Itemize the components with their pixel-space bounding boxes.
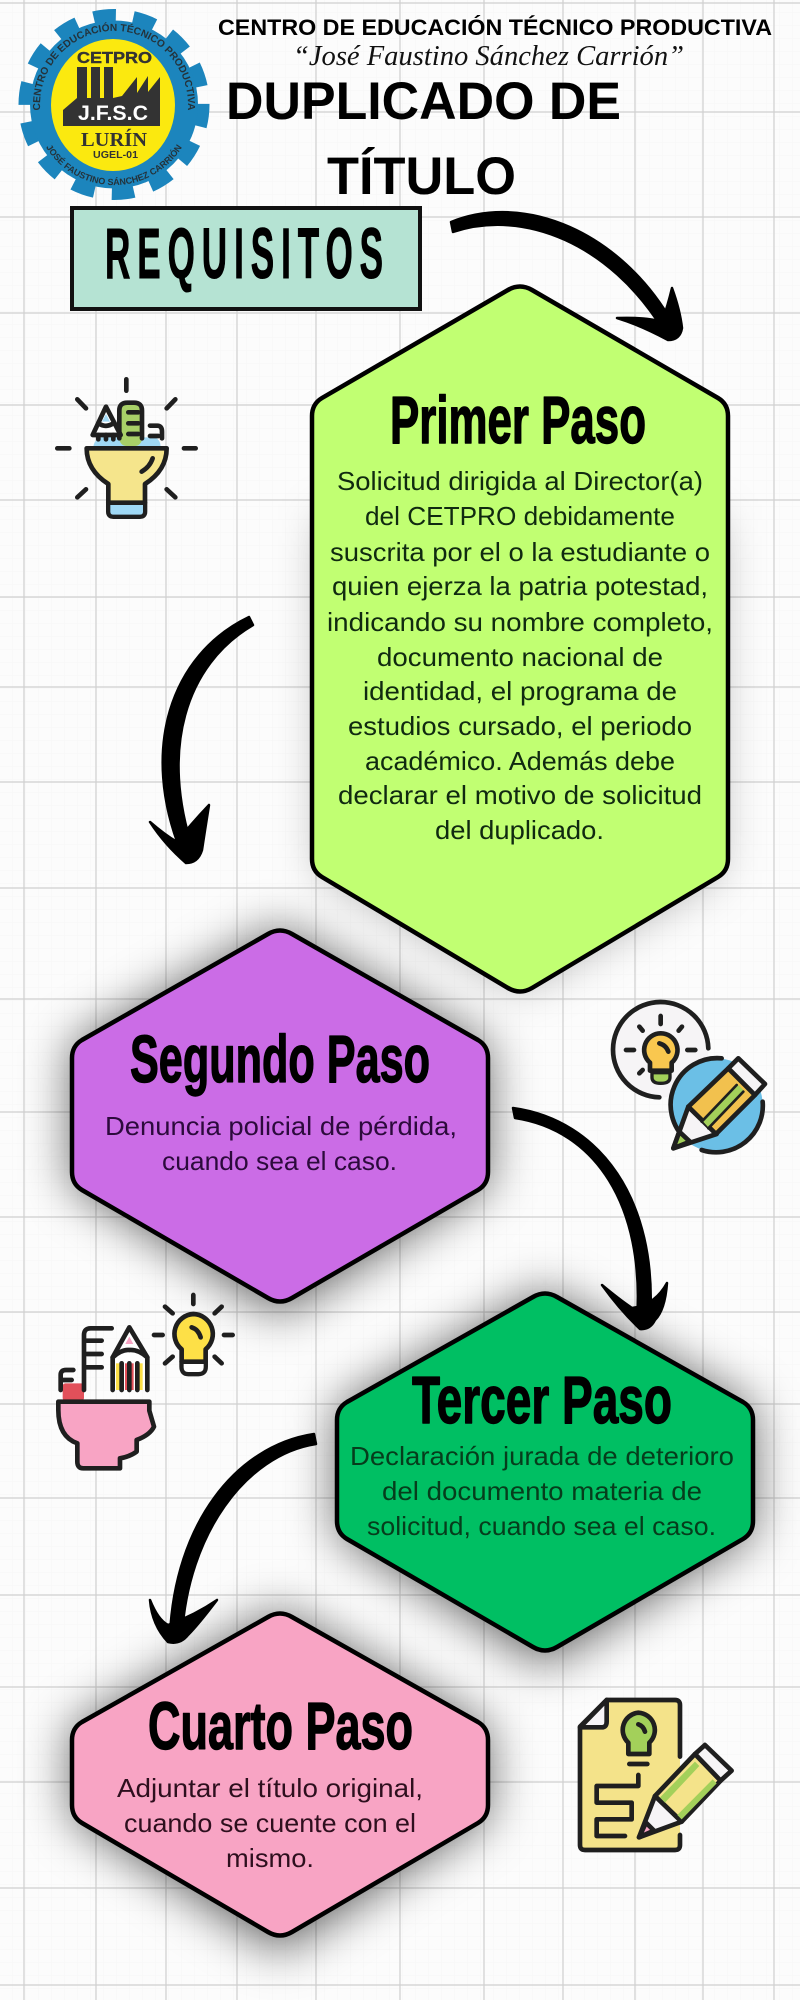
heading: tercer paso: Tercer Paso xyxy=(412,1363,672,1438)
logo: CETPRO gear emblem: CENTRO DE EDUCACIÓN TÉCNICO PRODUCTIVA xyxy=(32,22,196,110)
icon: head with pencil, ruler and light bulb xyxy=(58,1295,233,1468)
header: school name: “José Faustino Sánchez Carrión” xyxy=(293,41,684,72)
heading: cuarto paso: Cuarto Paso xyxy=(148,1689,413,1764)
arrow: requisitos to primer paso xyxy=(451,212,682,340)
logo: CETPRO gear emblem xyxy=(18,9,210,200)
text: cuarto paso body: mismo. xyxy=(226,1843,314,1873)
logo: CETPRO gear emblem: LURÍN xyxy=(81,129,147,151)
text: cuarto paso body: cuando se cuente con el xyxy=(124,1808,416,1838)
text: primer paso body: académico. Además debe xyxy=(365,746,675,776)
text: primer paso body: indicando su nombre completo, xyxy=(327,607,713,637)
text: primer paso body: identidad, el programa de xyxy=(363,676,677,706)
header: institution name: CENTRO DE EDUCACIÓN TÉCNICO PRODUCTIVA xyxy=(218,15,772,40)
icon: document with bulb and pencil xyxy=(580,1700,732,1850)
logo: CETPRO gear emblem: J.F.S.C xyxy=(78,102,148,125)
logo: CETPRO gear emblem: JOSÉ FAUSTINO SÁNCHEZ CARRIÓN xyxy=(46,144,182,186)
icon: light bulb and pencil on circles xyxy=(613,1002,765,1152)
panel: segundo paso xyxy=(72,930,488,1302)
arrow: segundo paso to tercer paso xyxy=(513,1108,667,1329)
panel: requisitos banner xyxy=(72,208,420,309)
text: tercer paso body: Declaración jurada de deterioro xyxy=(350,1441,734,1471)
text: primer paso body: del duplicado. xyxy=(435,815,604,845)
panel: requisitos banner: REQUISITOS xyxy=(105,215,390,294)
arrow: primer paso to segundo paso xyxy=(150,617,253,863)
text: primer paso body: suscrita por el o la estudiante o xyxy=(330,537,710,567)
heading: segundo paso: Segundo Paso xyxy=(130,1022,430,1097)
arrow: tercer paso to cuarto paso xyxy=(150,1434,316,1643)
text: tercer paso body: del documento materia de xyxy=(382,1476,702,1506)
text: cuarto paso body: Adjuntar el título original, xyxy=(117,1773,423,1803)
text: primer paso body: declarar el motivo de solicitud xyxy=(338,780,702,810)
logo: CETPRO gear emblem: UGEL-01 xyxy=(93,150,138,161)
text: segundo paso body: Denuncia policial de pérdida, xyxy=(105,1111,457,1141)
text: primer paso body: estudios cursado, el periodo xyxy=(348,711,692,741)
icon: lamp with pencil and ruler xyxy=(57,379,196,517)
text: tercer paso body xyxy=(350,1441,734,1541)
text: primer paso body xyxy=(327,466,713,845)
text: segundo paso body: cuando sea el caso. xyxy=(162,1146,397,1176)
title: DUPLICADO DE xyxy=(226,72,621,131)
text: primer paso body: quien ejerza la patria potestad, xyxy=(332,571,708,601)
text: primer paso body: documento nacional de xyxy=(377,642,663,672)
panel: primer paso xyxy=(312,286,728,992)
title xyxy=(226,72,621,206)
title: TÍTULO xyxy=(327,146,516,206)
text: segundo paso body xyxy=(105,1111,457,1176)
text: primer paso body: del CETPRO debidamente xyxy=(365,501,675,531)
panel: tercer paso xyxy=(337,1294,753,1650)
logo: CETPRO gear emblem: CETPRO xyxy=(77,50,152,67)
panel: cuarto paso xyxy=(72,1614,488,1936)
text: tercer paso body: solicitud, cuando sea el caso. xyxy=(367,1511,716,1541)
heading: primer paso: Primer Paso xyxy=(390,383,646,458)
text: cuarto paso body xyxy=(117,1773,423,1873)
text: primer paso body: Solicitud dirigida al Director(a) xyxy=(337,466,703,496)
